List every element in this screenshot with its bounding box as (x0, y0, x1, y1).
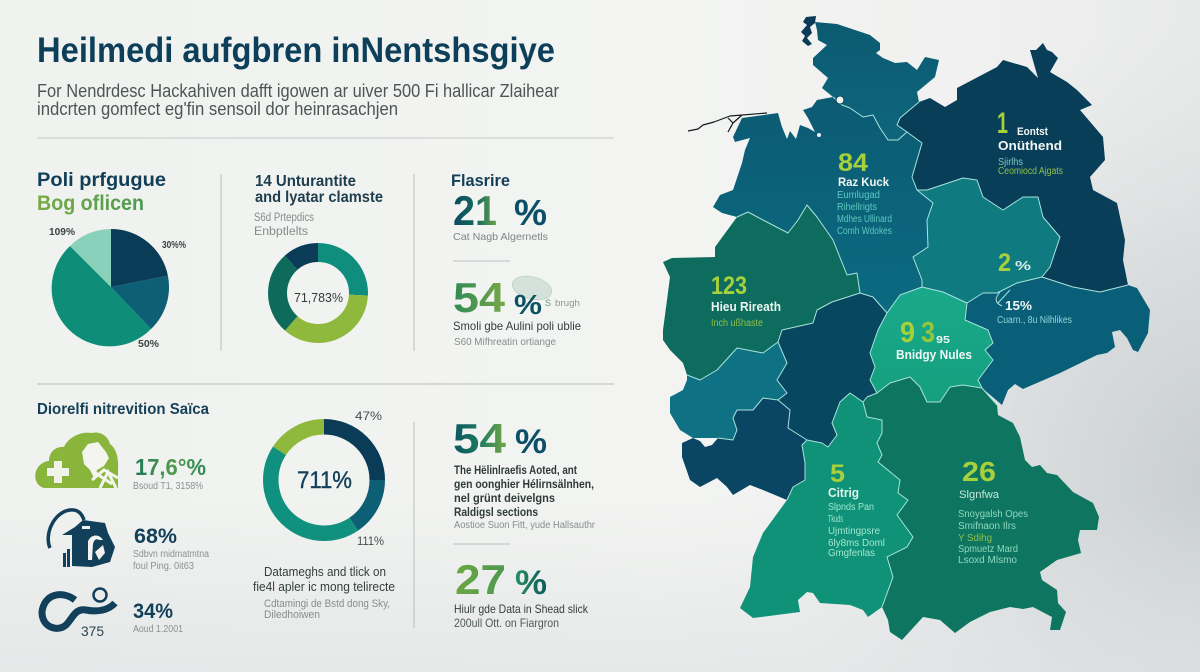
lower donut chart (271, 427, 377, 533)
label: north-west region: Rihellrigts (837, 202, 877, 213)
lower donut caption: Datameghs and tlick on (264, 564, 386, 579)
donut description: S6d Prtepdics (254, 212, 314, 224)
label: east region: 15% (1005, 298, 1032, 313)
label: west region (711, 272, 781, 329)
panel: key figures top (451, 172, 581, 348)
stat 17,6 percent: 17,6°% (135, 454, 206, 480)
stat 34 percent: Aoud 1.2001 (133, 624, 183, 635)
donut heading: 14 Unturantite (255, 173, 356, 190)
donut heading (255, 173, 383, 206)
panel: key figures bottom (453, 415, 596, 630)
label: north-east region: Ceomiocd Ajgats (998, 166, 1063, 177)
stat 27 percent: Hiulr gde Data in Shead slick (454, 602, 589, 616)
label: north-west region: 84 (838, 149, 868, 177)
region: centre light (870, 287, 993, 402)
stat 68 percent: foul Ping. 0it63 (133, 561, 194, 572)
stat 21 percent: Cat Nagb Algernetls (453, 231, 548, 243)
donut chart (278, 252, 358, 334)
stat 27 percent (454, 556, 589, 630)
label: east region: Cuarn., 8u Nilhlikes (997, 315, 1072, 326)
label: north-west region: Eumlugad (837, 190, 880, 201)
stat 54 percent: S60 Mifhreatin ortiange (454, 336, 556, 348)
lower donut caption (253, 564, 395, 621)
stat lower 54 percent (453, 415, 596, 531)
region: west (663, 205, 860, 380)
stat 21 percent: % (514, 192, 547, 233)
icon: dark cloud with building (48, 510, 115, 567)
label: centre light region: Bnidgy Nules (896, 347, 972, 362)
label: central east region (998, 249, 1032, 277)
stat 54 percent (453, 272, 581, 348)
donut description: Enbptlelts (254, 226, 308, 238)
stat lower 54 percent: Raldigsl sections (454, 505, 538, 519)
lower donut caption: fie4l apler ic mong telirecte (253, 579, 395, 594)
pie labels (49, 226, 187, 350)
pie heading: Bog oflicen (37, 192, 144, 215)
donut description (254, 212, 314, 238)
intro text (37, 81, 559, 119)
stat 34 percent (133, 600, 183, 635)
stat lower 54 percent: Aostioe Suon Fitt, yude Hallsauthr (454, 520, 596, 531)
label: north-west region: Comh Wdokes (837, 226, 892, 237)
stat 17,6 percent (133, 454, 206, 492)
stat 54 percent: 54 (453, 274, 506, 321)
label: west region: Inch ußhaste (711, 318, 763, 329)
lower donut centre value: 711% (297, 467, 352, 494)
label: north-west region (837, 149, 892, 237)
panel: lower left statistics (35, 401, 209, 639)
label: centre light region (896, 317, 972, 362)
stat 34 percent: 34% (133, 600, 173, 623)
region: central east (913, 178, 1060, 303)
label: south-east region: 26 (962, 456, 996, 487)
figures heading: Flasrire (451, 172, 510, 190)
label: south-east region: Y Sdihg (958, 533, 992, 544)
label: south-centre region: Slpnds Pan (828, 502, 874, 513)
pie heading: Poli prfgugue (37, 169, 166, 191)
label: central east region: % (1015, 258, 1032, 273)
lower donut labels: 111% (357, 536, 384, 548)
region: south-west teal (670, 342, 787, 440)
stat 68 percent: 68% (134, 525, 177, 548)
icon: dark swirl: 375 (81, 623, 104, 639)
label: west region: Hieu Rireath (711, 299, 781, 314)
label: north-west region: Raz Kuck (838, 175, 889, 189)
region: centre dark (777, 293, 887, 447)
stat lower 54 percent: gen oonghier Hélirnsälnhen, (454, 477, 594, 491)
region: north-east (897, 43, 1128, 292)
panel: lower donut (253, 411, 395, 621)
label: south-east region: Slgnfwa (959, 489, 1000, 501)
stat 54 percent: % (514, 289, 542, 320)
donut centre value: 71,783% (294, 291, 343, 305)
label: south-centre region: 5 (830, 460, 845, 488)
label: south-centre region: Gmgfenlas (828, 548, 875, 559)
lower donut labels: 47% (355, 411, 382, 423)
label: south-east region (958, 456, 1028, 566)
stat 68 percent: Sdbvn rnidmatmtna (133, 549, 209, 560)
stat lower 54 percent: 54 (453, 415, 507, 462)
label: centre light region: 3 (921, 317, 935, 349)
map of regions (663, 16, 1150, 640)
pie labels: 50% (138, 338, 160, 350)
stat 54 percent: Smoli gbe Aulini poli ublie (453, 319, 581, 333)
label: south-east region: Snoygalsh Opes (958, 509, 1028, 520)
lower donut caption: Cdtamingi de Bstd dong Sky, (264, 598, 390, 610)
stat 68 percent (133, 525, 209, 572)
stat lower 54 percent: % (515, 423, 547, 461)
label: north-east region: Sjirlhs (998, 157, 1023, 168)
intro text: indcrten gomfect eg'fin sensoil dor heinrasachjen (37, 99, 398, 119)
region: north-west (713, 97, 933, 313)
region: east (965, 277, 1150, 405)
label: north-west region: Mdhes Ullinard (837, 214, 892, 225)
label: south-centre region: Tkuds (828, 514, 843, 525)
region borders (687, 97, 1128, 607)
label: north-east region: 1 (997, 107, 1008, 140)
lower donut labels (355, 411, 384, 548)
region: south-east (863, 377, 1099, 640)
stat 27 percent: 200ull Ott. on Fiargron (454, 616, 559, 630)
icon: green cloud with cross (35, 433, 118, 488)
pie labels: 109% (49, 226, 76, 238)
pie labels: 30%% (162, 239, 187, 251)
stat 27 percent: % (515, 564, 547, 602)
region: south-west dark (682, 398, 807, 500)
label: north-east region: Onüthend (998, 139, 1062, 153)
label: central east region: 2 (998, 249, 1011, 277)
pie heading (37, 169, 166, 215)
stat 54 percent: S (545, 298, 551, 308)
donut heading: and lyatar clamste (255, 189, 383, 206)
stat 17,6 percent: Bsoud T1, 3158% (133, 481, 203, 492)
label: north-east region: Eontst (1017, 126, 1048, 138)
islands and estuary details (801, 16, 844, 137)
region: north (813, 22, 939, 140)
label: south-east region: Spmuetz Mard (958, 544, 1018, 555)
stat lower 54 percent: nel grünt deivelgns (454, 491, 555, 505)
stat 54 percent: brugh (555, 298, 580, 308)
section heading: Diorelfi nitrevition Saïca (37, 401, 209, 418)
panel: pie chart section (37, 169, 187, 350)
label: south-centre region: Ujmtingpsre (828, 526, 880, 537)
label: centre light region: 95 (936, 335, 951, 346)
lower donut caption: Diledhoiwen (264, 609, 320, 621)
label: north-east region (997, 107, 1063, 177)
pie chart (52, 229, 169, 346)
title: Heilmedi aufgbren inNentshsgiye (37, 31, 555, 70)
region: south-centre (740, 393, 913, 618)
label: south-centre region: 6ly8ms Doml (828, 538, 885, 549)
label: south-east region: Lsoxd Mlsmo (958, 555, 1017, 566)
intro text: For Nendrdesc Hackahiven dafft igowen ar uiver 500 Fi hallicar Zlaihear (37, 81, 559, 101)
label: centre light region: 9 (900, 317, 915, 349)
label: south-centre region (828, 460, 885, 559)
icon: faint disc (510, 272, 554, 304)
icon: dark swirl (42, 588, 115, 639)
label: east region (997, 298, 1072, 326)
stat 21 percent: 21 (453, 187, 497, 234)
stat lower 54 percent: The Hëlinlraefis Aoted, ant (454, 463, 577, 477)
label: west region: 123 (711, 272, 747, 300)
panel: donut section (254, 173, 383, 334)
decorative river line (688, 113, 767, 132)
label: south-centre region: Citrig (828, 485, 859, 500)
label: south-east region: Smifnaon Ilrs (958, 521, 1016, 532)
stat 27 percent: 27 (455, 556, 506, 603)
stat 21 percent (453, 187, 548, 243)
